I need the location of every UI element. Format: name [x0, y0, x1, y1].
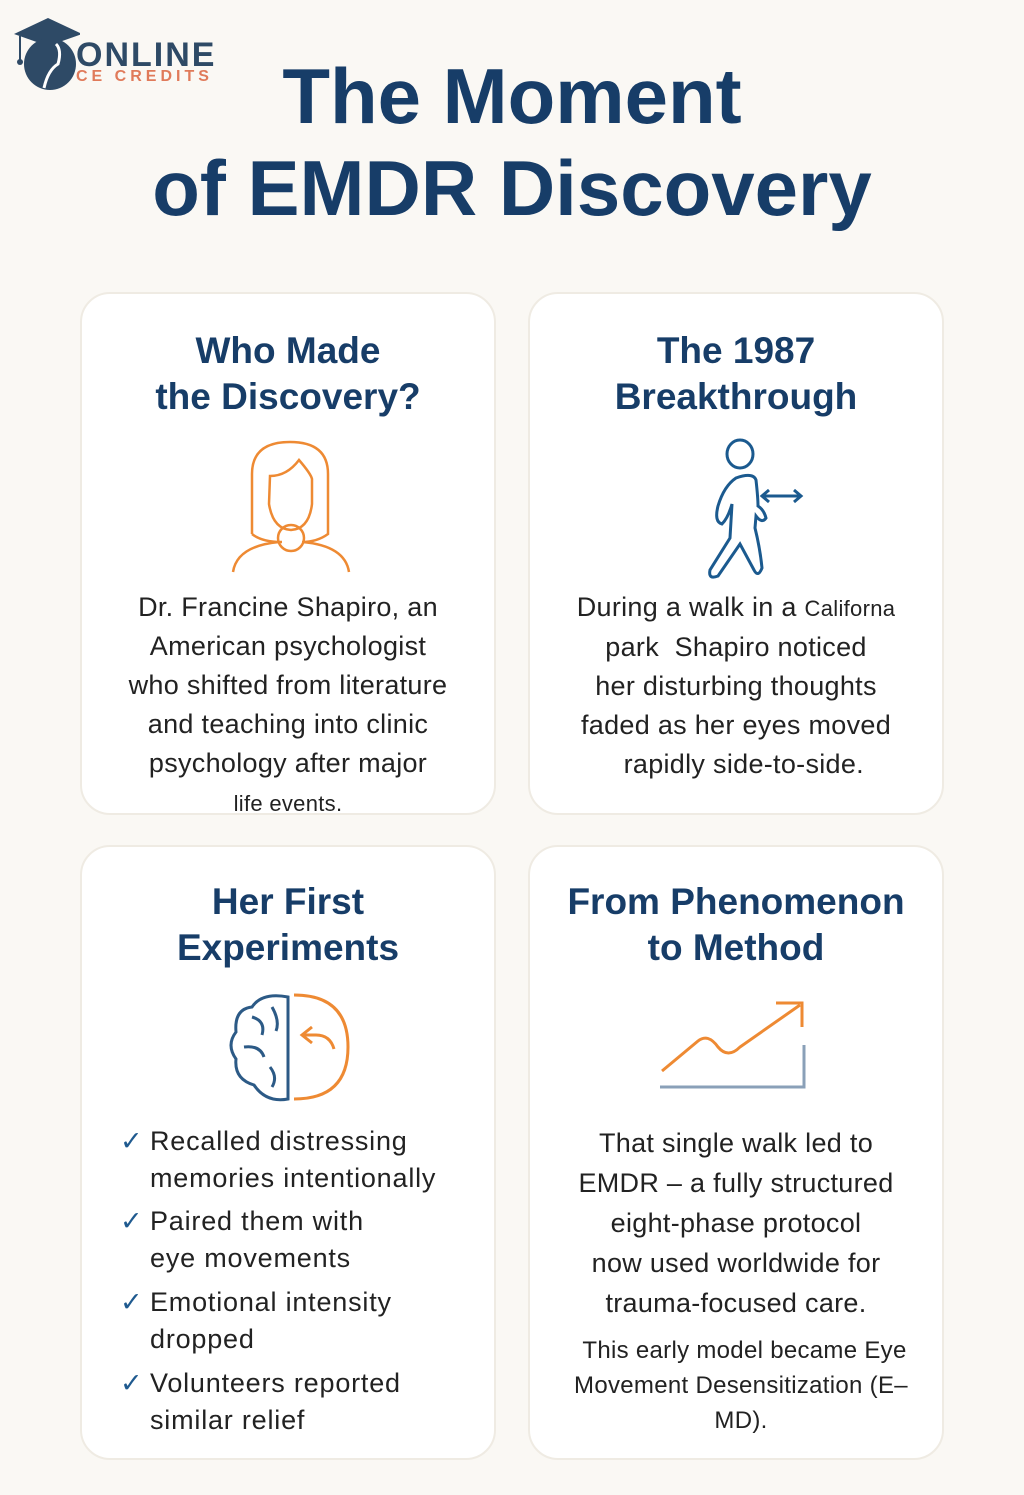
text [578, 1128, 894, 1318]
text: now used worldwide for [592, 1248, 880, 1278]
checklist: Volunteers reported [150, 1368, 401, 1398]
icon: rising chart [660, 1002, 806, 1088]
text [577, 592, 895, 779]
checklist [120, 1126, 436, 1435]
heading: Breakthrough [615, 376, 857, 417]
heading: Her First [212, 881, 364, 922]
panel: phenomenon to method [528, 845, 944, 1460]
text: EMDR – a fully structured [578, 1168, 894, 1198]
heading: The 1987 [657, 330, 815, 371]
text: During a walk in a Californa [577, 592, 895, 622]
text [128, 592, 447, 816]
panel: first experiments [80, 845, 496, 1460]
heading: From Phenomenon [567, 881, 905, 922]
heading: to Method [648, 927, 824, 968]
heading: the Discovery? [155, 376, 421, 417]
logo: CE CREDITS [76, 68, 213, 85]
panel: 1987 breakthrough [528, 292, 944, 815]
panel: first experiments: ✓ [120, 1206, 143, 1236]
heading [155, 330, 421, 417]
title [152, 52, 872, 232]
heading [615, 330, 857, 417]
text: That single walk led to [599, 1128, 873, 1158]
note: MD). [714, 1407, 768, 1434]
panel: first experiments: ✓ [120, 1287, 143, 1317]
note: Movement Desensitization (E– [574, 1372, 908, 1399]
panel: first experiments: ✓ [120, 1368, 143, 1398]
heading: Experiments [177, 927, 399, 968]
text: trauma-focused care. [605, 1288, 867, 1318]
text: faded as her eyes moved [581, 710, 891, 740]
checklist: memories intentionally [150, 1163, 436, 1193]
heading [177, 881, 399, 968]
checklist: similar relief [150, 1405, 305, 1435]
checklist: dropped [150, 1324, 255, 1354]
text: eight-phase protocol [611, 1208, 861, 1238]
panel: first experiments: ✓ [120, 1126, 143, 1156]
text: life events. [234, 791, 342, 816]
text: who shifted from literature [129, 670, 447, 700]
heading: Who Made [196, 330, 380, 371]
title: of EMDR Discovery [152, 144, 872, 232]
note [574, 1337, 908, 1434]
checklist: Recalled distressing [150, 1126, 408, 1156]
checklist: eye movements [150, 1243, 351, 1273]
text: and teaching into clinic [148, 709, 428, 739]
text: her disturbing thoughts [595, 671, 877, 701]
text: rapidly side-to-side. [624, 749, 864, 779]
text: park Shapiro noticed [605, 632, 867, 662]
panel: who made the discovery [80, 292, 496, 815]
checklist: Paired them with [150, 1206, 364, 1236]
icon: walking person [708, 438, 804, 579]
logo: ONLINE [76, 36, 216, 74]
checklist: Emotional intensity [150, 1287, 392, 1317]
text: Dr. Francine Shapiro, an [138, 592, 438, 622]
icon: brain with arrow [229, 994, 350, 1102]
icon: woman [232, 440, 350, 572]
title: The Moment [282, 52, 742, 140]
logo [14, 18, 216, 90]
text: American psychologist [150, 631, 426, 661]
text: psychology after major [149, 748, 427, 778]
note: This early model became Eye [582, 1337, 907, 1364]
heading [567, 881, 905, 968]
